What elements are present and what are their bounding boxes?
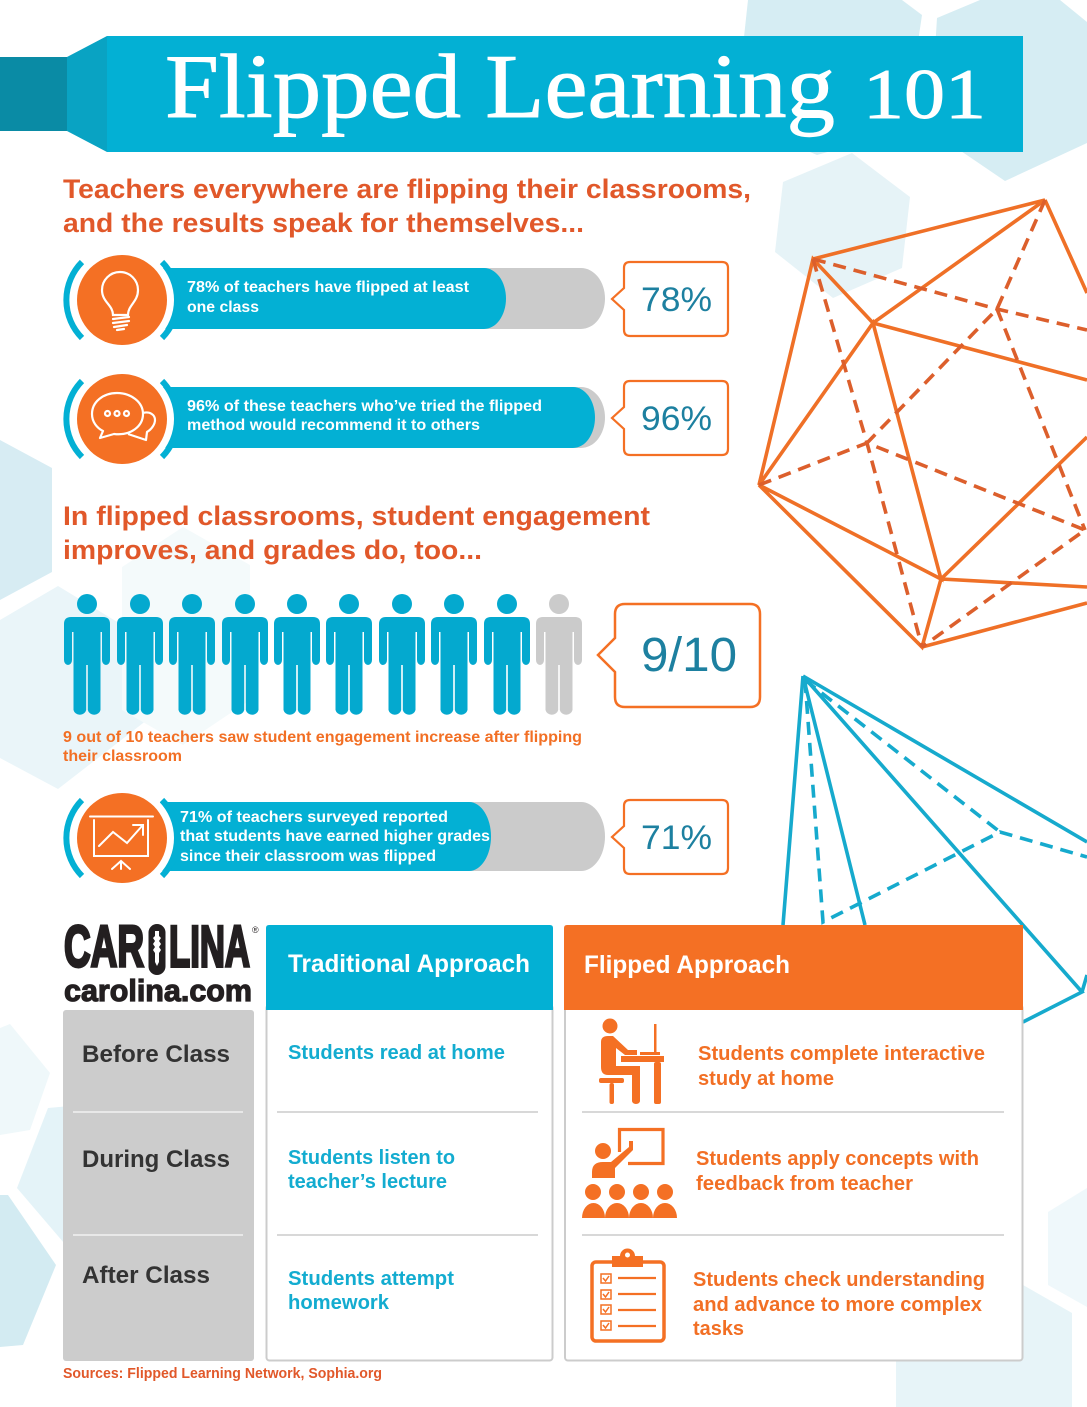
row labels column: After Class bbox=[82, 1262, 210, 1289]
heading: student engagement: improves, and grades do, too... bbox=[63, 535, 482, 565]
heading: student engagement bbox=[63, 501, 650, 565]
panel: flipped approach: feedback from teacher bbox=[696, 1173, 913, 1195]
stat row: 78 percent: 78% of teachers have flipped at least bbox=[187, 279, 470, 296]
stat row: 71 percent: 71% of teachers surveyed reported bbox=[180, 809, 448, 826]
logo: Carolina: CAR bbox=[64, 914, 144, 980]
stat row: 96 percent: 96% of these teachers who’ve tried the flipped bbox=[187, 398, 542, 415]
icon: clipboard checklist bbox=[592, 1248, 664, 1341]
stat row: 78 percent: one class bbox=[187, 299, 259, 316]
panel: traditional approach: Students attempt bbox=[288, 1268, 454, 1290]
panel: traditional approach: teacher’s lecture bbox=[288, 1171, 447, 1193]
stat row: 78 percent bbox=[66, 248, 605, 352]
pictogram: 9 of 10 teachers bbox=[64, 594, 582, 715]
logo: Carolina: LINA bbox=[169, 914, 250, 980]
stat row: 96 percent bbox=[66, 367, 605, 471]
panel: flipped approach: Students complete interactive bbox=[698, 1043, 985, 1065]
heading: student engagement: In flipped classrooms, student engagement bbox=[63, 501, 650, 531]
blue wireframe pyramid bbox=[783, 676, 1087, 1022]
caption: student engagement: 9 out of 10 teachers saw student engagement increase after flipping bbox=[63, 729, 582, 746]
panel: traditional approach bbox=[266, 925, 553, 1360]
panel: traditional approach: Students listen to bbox=[288, 1147, 455, 1169]
caption: student engagement: their classroom bbox=[63, 748, 182, 765]
title: 101 bbox=[863, 56, 986, 134]
icon: speech bubbles bbox=[92, 393, 155, 440]
callout: 9/10: 9/10 bbox=[641, 629, 737, 682]
orange wireframe polyhedron bbox=[759, 200, 1087, 647]
icon: teacher at board bbox=[582, 1130, 677, 1218]
stat row: 96 percent: method would recommend it to others bbox=[187, 417, 480, 434]
callout: 96%: 96% bbox=[641, 400, 712, 438]
row labels column bbox=[63, 1010, 254, 1361]
panel: flipped approach bbox=[564, 925, 1023, 1360]
row labels column: Before Class bbox=[82, 1041, 230, 1068]
stat row: 71 percent: that students have earned higher grades bbox=[180, 828, 490, 845]
title banner bbox=[0, 36, 1023, 152]
logo: Carolina bbox=[64, 914, 259, 1008]
caption: student engagement bbox=[63, 729, 582, 765]
icon: presentation chart bbox=[90, 816, 153, 869]
icon: light bulb bbox=[102, 272, 138, 330]
panel: traditional approach: homework bbox=[288, 1292, 390, 1314]
callout: 9/10 bbox=[598, 604, 760, 707]
icon: student at desk bbox=[599, 1018, 664, 1104]
panel: flipped approach: Flipped Approach bbox=[584, 951, 790, 979]
callout: 78%: 78% bbox=[641, 281, 712, 319]
panel: flipped approach: Students check understanding bbox=[693, 1269, 985, 1291]
stat row: 71 percent bbox=[66, 786, 605, 890]
logo: Carolina: carolina.com bbox=[64, 973, 252, 1008]
panel: traditional approach: Traditional Approach bbox=[288, 950, 530, 978]
panel: flipped approach: tasks bbox=[693, 1318, 744, 1340]
title: Flipped Learning bbox=[165, 36, 835, 137]
logo: Carolina: ® bbox=[252, 925, 259, 935]
sources: Sources: Flipped Learning Network, Sophia.org bbox=[63, 1366, 382, 1382]
heading: teachers flipping: Teachers everywhere are flipping their classrooms, bbox=[63, 174, 751, 204]
heading: teachers flipping: and the results speak for themselves... bbox=[63, 208, 584, 238]
panel: traditional approach: Students read at home bbox=[288, 1042, 505, 1064]
heading: teachers flipping bbox=[63, 174, 751, 238]
callout: 71%: 71% bbox=[641, 819, 712, 857]
callout: 71% bbox=[612, 800, 728, 874]
row labels column: During Class bbox=[82, 1146, 230, 1173]
panel: flipped approach: and advance to more complex bbox=[693, 1294, 982, 1316]
panel: flipped approach: Students apply concepts with bbox=[696, 1148, 979, 1170]
callout: 78% bbox=[612, 262, 728, 336]
stat row: 71 percent: since their classroom was flipped bbox=[180, 848, 436, 865]
callout: 96% bbox=[612, 381, 728, 455]
panel: flipped approach: study at home bbox=[698, 1068, 834, 1090]
